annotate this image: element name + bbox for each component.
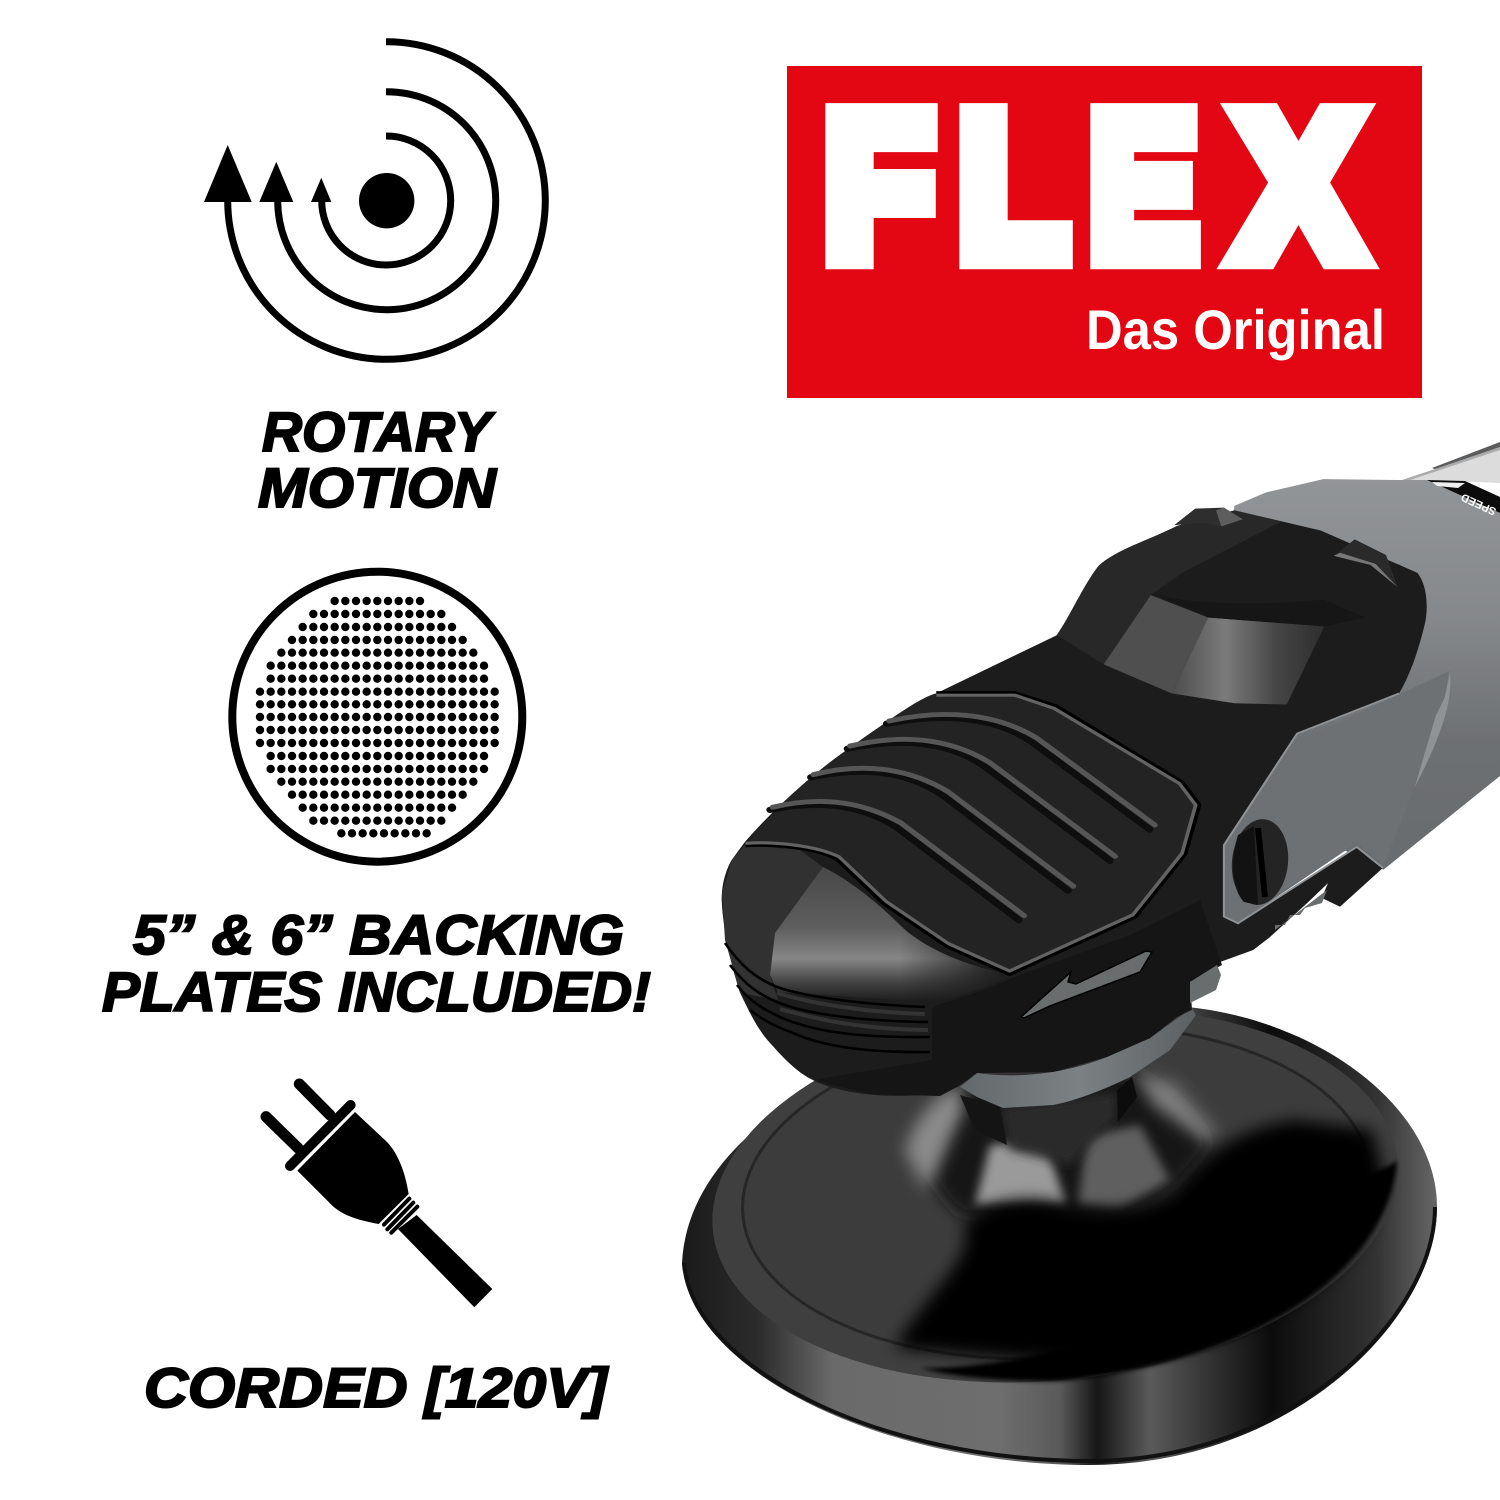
- product: direction arrow: [1021, 951, 1152, 1018]
- hub right fin: [1117, 1077, 1137, 1122]
- wordmark: FLEX: L: [959, 73, 1067, 300]
- icon: rotary motion: [204, 42, 545, 359]
- heading: backing plates included: [102, 903, 651, 1023]
- product: metal collar: [960, 1008, 1196, 1108]
- product: nose of body: [722, 845, 1010, 1052]
- rear hump front face: [1104, 593, 1365, 705]
- product: black reflection on disc: [895, 1120, 1397, 1381]
- grey edge of shell: [1224, 693, 1399, 923]
- body mounting bump left: [1174, 508, 1243, 526]
- nose left dark facet: [722, 845, 823, 1000]
- wordmark: FLEX: E: [1090, 73, 1197, 299]
- black body shell: [722, 510, 1427, 1096]
- heading: corded 120V: CORDED [120V]: [144, 1356, 610, 1419]
- wordmark: FLEX: X: [1237, 74, 1360, 300]
- panel highlight: [1415, 673, 1450, 787]
- wordmark: FLEX: [825, 73, 1360, 300]
- wordmark: FLEX: F: [825, 73, 933, 300]
- product: lock screw: [1228, 816, 1292, 908]
- housing side panel and screw bezel: [1222, 671, 1449, 923]
- label word: SPEED: SPEED: [1459, 490, 1498, 517]
- product: trigger teeth: [1275, 890, 1327, 930]
- grip rib 1: [887, 718, 1150, 830]
- product: gear nut: [1190, 965, 1221, 1003]
- product: rating label: [1402, 442, 1500, 517]
- product: polisher body: [722, 479, 1500, 1096]
- heading: rotary motion: [258, 400, 498, 519]
- nose lit facet: [770, 867, 1010, 1002]
- rear cap upper facet: [1057, 510, 1281, 664]
- body mounting bump right: [1334, 539, 1398, 587]
- logo: FLEX Das Original: [787, 66, 1422, 398]
- heading: backing plates included: PLATES INCLUDED!: [102, 960, 651, 1023]
- grip rib 2: [847, 743, 1110, 861]
- nose vent slots: [725, 943, 930, 1052]
- product: hub cone and shaft: [905, 1070, 1215, 1217]
- heading: rotary motion: ROTARY: [262, 400, 496, 463]
- hub left fin: [960, 1095, 1007, 1145]
- product: body underside shadow: [813, 900, 1222, 1096]
- tagline: Das Original: Das Original: [1086, 298, 1385, 361]
- product: grip plate: [745, 693, 1199, 974]
- grip rib 3: [811, 772, 1068, 891]
- product: polisher backing disc: [682, 975, 1437, 1465]
- grip rib 4: [770, 805, 1019, 920]
- icon: power plug: [266, 1084, 492, 1307]
- heading: backing plates included: 5” & 6” BACKING: [133, 903, 624, 966]
- icon: backing plate with dot pattern: [232, 572, 522, 862]
- heading: rotary motion: MOTION: [258, 456, 498, 519]
- grey rear housing: [1203, 479, 1500, 870]
